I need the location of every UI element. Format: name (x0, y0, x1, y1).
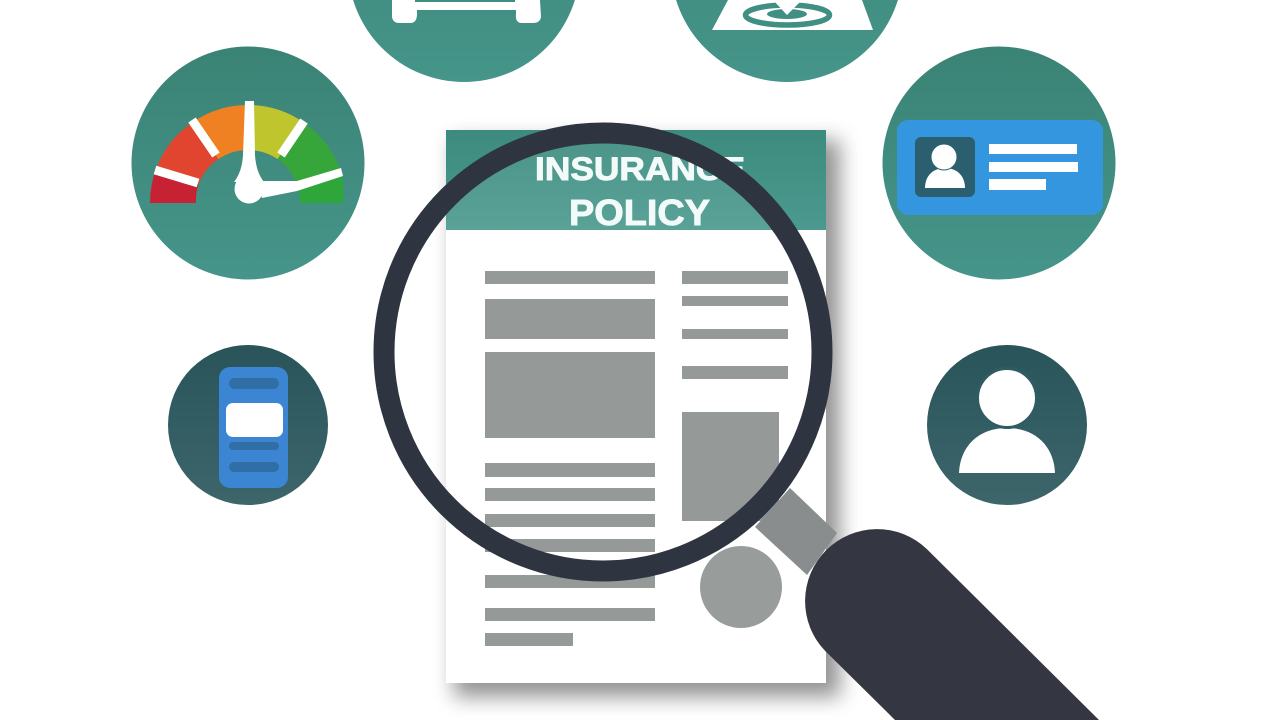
heading: INSURANCE POLICY: POLICY (569, 192, 710, 233)
magnifier lens ring (384, 133, 822, 571)
infographic: insurance policy under magnifying glass (132, 0, 1116, 720)
icon: road location badge (top right) (671, 0, 903, 82)
heading: INSURANCE POLICY (535, 151, 745, 233)
gauge: tick marks (155, 120, 304, 183)
heading: INSURANCE POLICY: INSURANCE (535, 151, 745, 187)
document right column text blocks (682, 271, 788, 521)
document header band (446, 130, 826, 233)
icon: person badge (927, 345, 1087, 505)
panel: insurance policy document (446, 130, 840, 697)
icon: driver ID card badge (882, 46, 1116, 280)
icon: magnifying glass (384, 133, 1099, 720)
gauge: needle and hub (234, 101, 343, 204)
magnifier handle (805, 529, 1099, 720)
document seal circle (700, 546, 782, 628)
icon: car badge (top left) (348, 0, 580, 82)
magnifier neck (755, 488, 837, 575)
document left column text blocks (485, 271, 655, 646)
icon: phone badge (168, 345, 328, 505)
gauge: coloured arc segments (150, 105, 343, 203)
icon: credit score gauge badge (132, 46, 364, 280)
